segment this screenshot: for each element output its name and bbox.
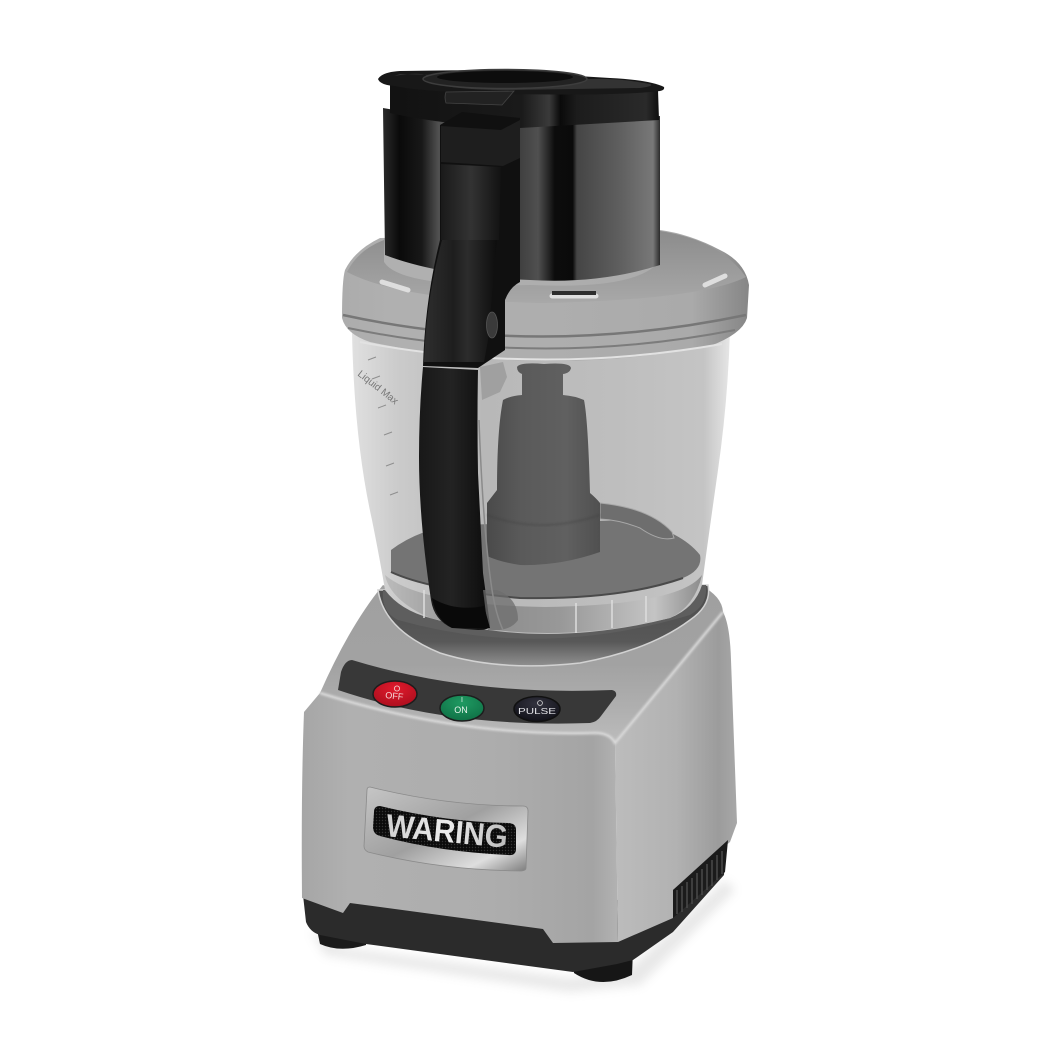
liquid max label: Liquid Max [355,369,400,407]
bowl wall [352,330,730,634]
upper tube collar [390,85,659,128]
handle grip [424,240,497,362]
right face [615,612,737,942]
metal hinge [480,362,507,400]
lid top deck [347,231,746,303]
lid clear bottom edge [360,342,722,360]
dark plinth [303,840,726,972]
inner floor of bowl [391,520,700,598]
handle bottom [432,598,490,628]
button: OFF [373,681,417,707]
base unit [302,585,737,982]
button: ON: ON [454,705,468,715]
upper handle column [423,112,520,368]
nameplate: WARING [385,807,509,855]
handle clear edge [479,420,503,630]
button: PULSE [514,696,560,722]
handle clear strip [483,590,518,630]
inner oval hollow [437,71,573,83]
top deck [320,585,723,743]
lid slots [382,276,725,296]
nameplate [364,787,528,871]
bowl seat ring [383,585,706,639]
control panel [338,660,616,724]
lower tube body [383,108,660,281]
lid second groove [348,328,735,349]
lid body [342,230,749,361]
bowl floor edge [391,572,683,598]
central slot shadow [552,291,596,295]
feed tube [378,70,664,281]
front face [302,693,618,943]
inner oval [423,70,587,88]
motor vent [673,840,728,918]
top tab [445,91,514,105]
button: PULSE: PULSE [518,706,556,716]
handle lower grip [419,367,490,630]
light edge highlight along deck [320,612,723,743]
rim [378,70,664,95]
button: OFF: OFF [385,690,404,702]
bowl foot band [385,575,702,633]
lid grooves [343,315,746,336]
pivot [486,312,498,338]
foot: left [316,925,366,949]
button: ON [440,695,484,721]
ground shadow [310,880,735,992]
bowl [352,330,730,639]
lid [342,230,749,361]
rim opening [394,74,651,90]
column top block [441,120,520,166]
blade disc [600,503,674,539]
foot: front right [572,950,633,982]
handle [419,112,520,630]
ribs on bowl foot [424,590,646,633]
column lower block [441,164,501,240]
drive shaft [487,363,600,565]
bowl seat collar [378,585,709,666]
button: ON: I [461,697,463,704]
measurement scale [355,357,400,495]
